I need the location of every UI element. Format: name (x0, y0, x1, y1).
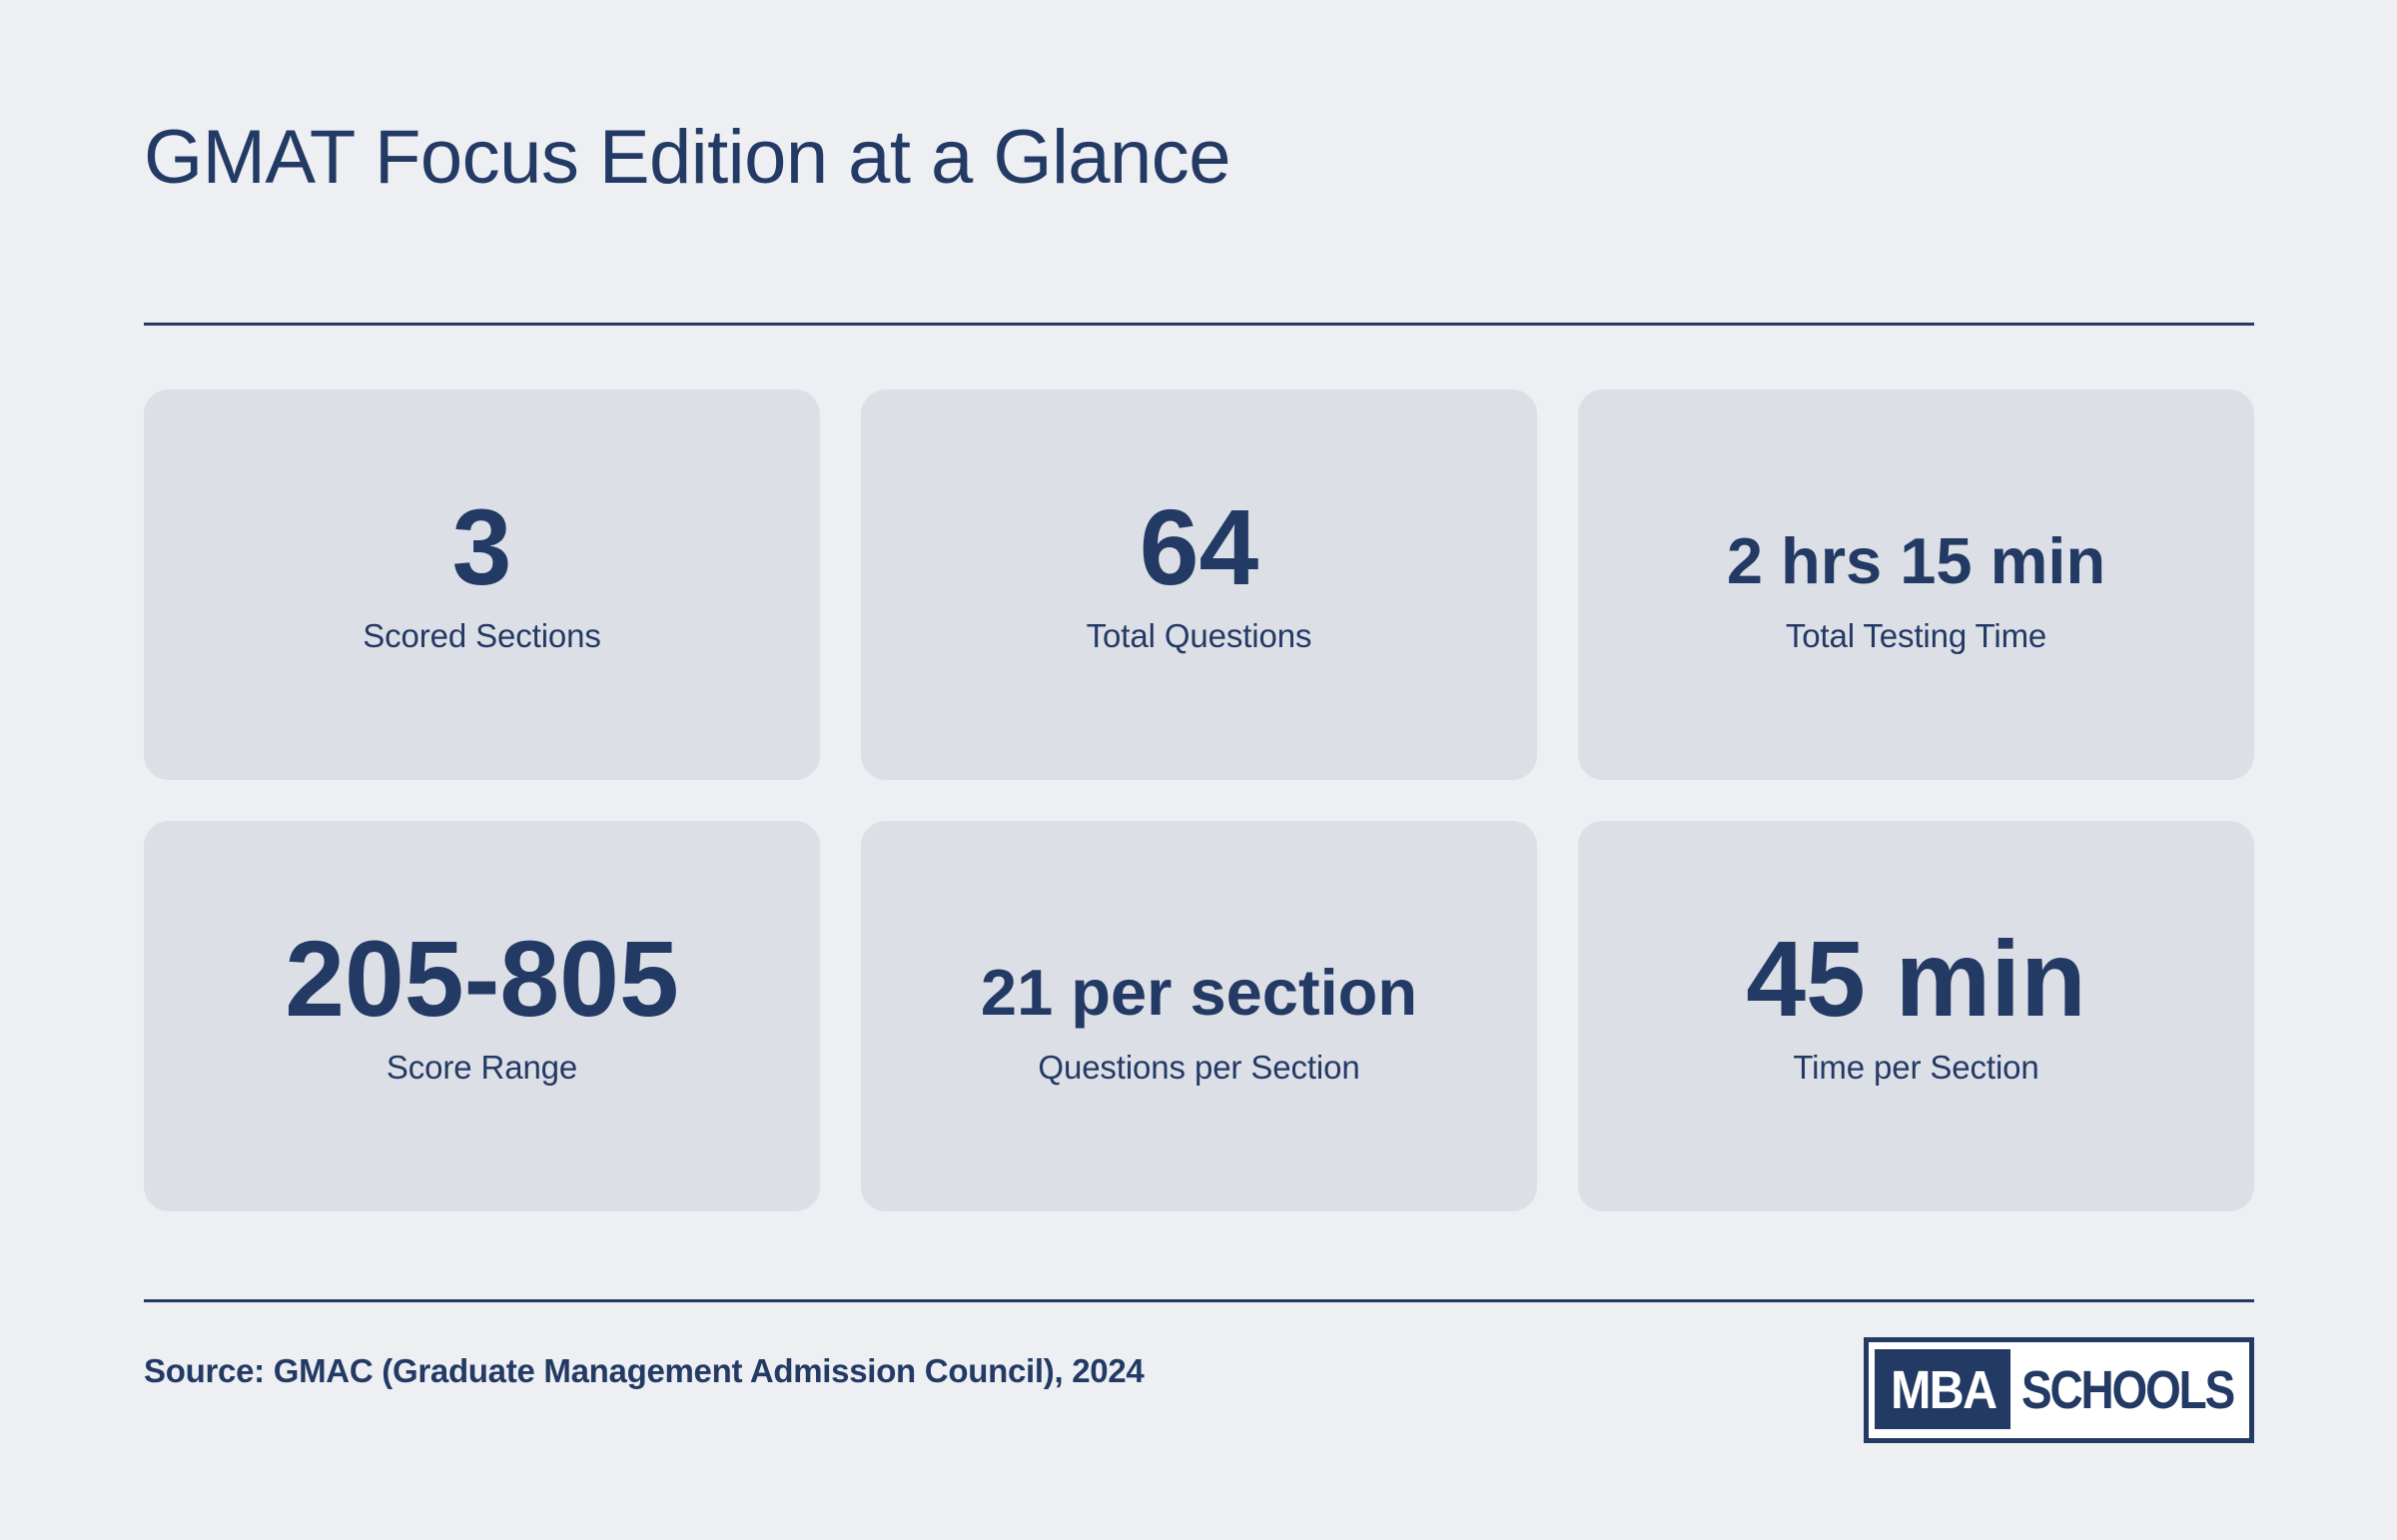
label: total questions: Total Questions (1087, 617, 1311, 654)
label: questions per section: Questions per Section (1038, 1049, 1360, 1086)
label: score range: Score Range (387, 1049, 577, 1086)
panel: score range (144, 821, 820, 1211)
value: 21 per section: 21 per section (981, 956, 1417, 1029)
label: scored sections: Scored Sections (363, 617, 601, 654)
value: 3: 3 (452, 487, 511, 607)
panel: scored sections (144, 389, 820, 780)
panel: total questions (861, 389, 1537, 780)
title: GMAT Focus Edition at a Glance (144, 115, 1230, 200)
value: 64: 64 (1140, 487, 1258, 607)
source note: Source: GMAC (Graduate Management Admission Council), 2024 (144, 1352, 1144, 1389)
panel: total testing time (1578, 389, 2254, 780)
panel: questions per section (861, 821, 1537, 1211)
value: 205-805: 205-805 (285, 919, 679, 1039)
value: 45 min: 45 min (1746, 919, 2086, 1039)
logo: MBA Schools: MBA (1891, 1359, 1997, 1420)
logo: MBA Schools (1864, 1337, 2254, 1443)
logo: MBA Schools: SCHOOLS (2021, 1360, 2234, 1420)
label: time per section: Time per Section (1793, 1049, 2039, 1086)
value: 2 hrs 15 min: 2 hrs 15 min (1727, 524, 2105, 597)
panel: time per section (1578, 821, 2254, 1211)
label: total testing time: Total Testing Time (1786, 617, 2046, 654)
